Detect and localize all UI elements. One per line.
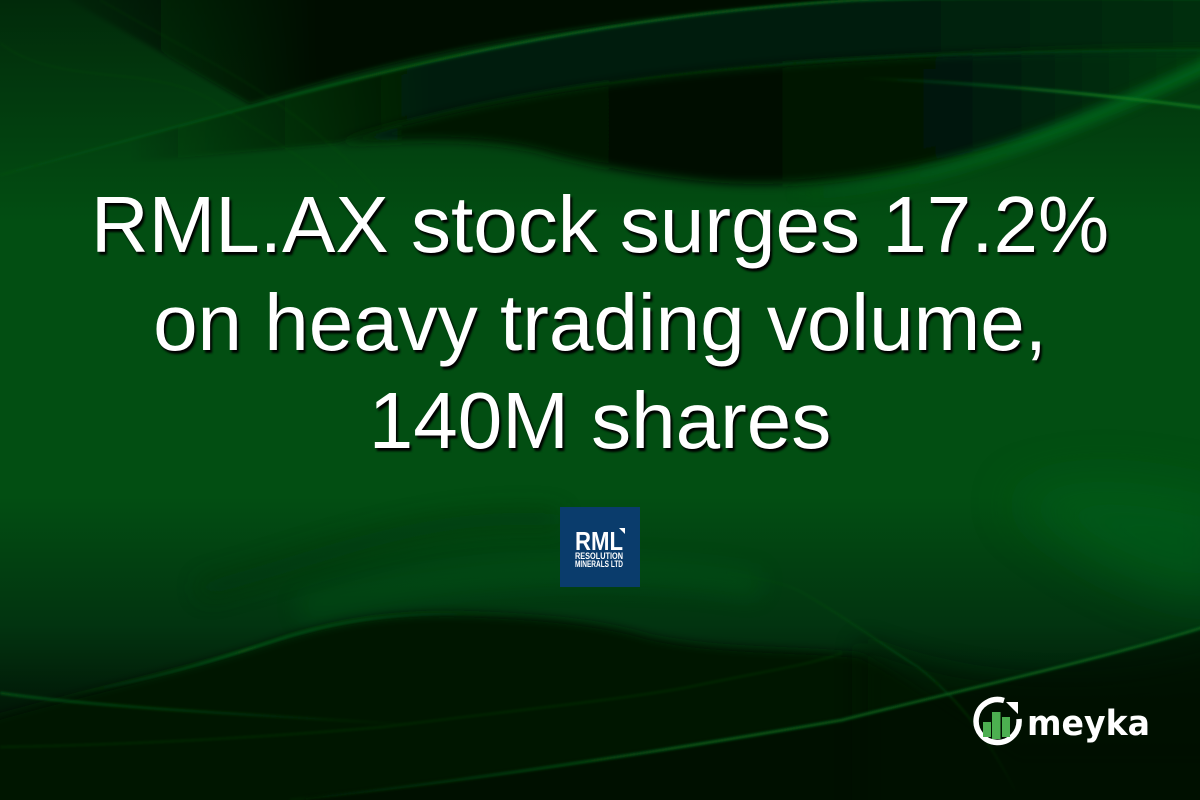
title: on heavy trading volume,	[153, 278, 1047, 367]
brand logo: meyka	[973, 696, 1150, 746]
logo: RML Resolution Minerals: RML	[575, 526, 623, 556]
title	[91, 180, 1110, 465]
logo: RML Resolution Minerals: MINERALS LTD	[575, 559, 623, 569]
icon: ring with bars	[976, 700, 1019, 743]
title: RML.AX stock surges 17.2%	[91, 180, 1109, 269]
logo: RML Resolution Minerals	[560, 507, 640, 587]
title: 140M shares	[369, 376, 831, 465]
top waves	[0, 0, 1200, 175]
wordmark: meyka	[1027, 704, 1150, 744]
bottom waves	[300, 571, 760, 610]
logo: RML Resolution Minerals: RESOLUTION	[575, 551, 623, 561]
